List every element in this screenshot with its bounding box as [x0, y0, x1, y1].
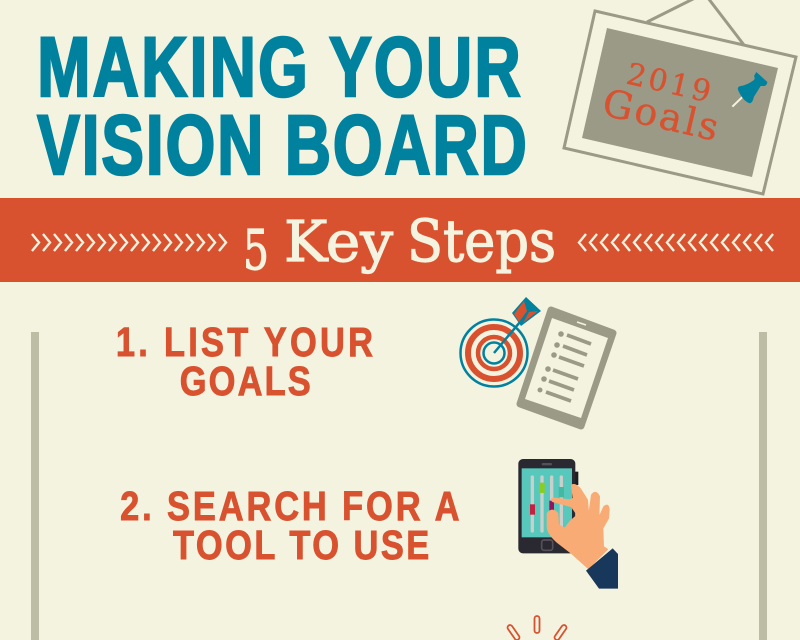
icon: hand on phone	[518, 459, 618, 589]
right side bar	[759, 332, 767, 640]
title: MAKING YOUR	[37, 19, 521, 114]
icon: burst rays	[507, 616, 567, 640]
banner heading: 5	[243, 218, 269, 282]
board	[582, 28, 778, 177]
step 1 text: 1. LIST YOUR	[116, 320, 373, 366]
banner heading: Steps	[407, 207, 556, 275]
banner heading	[243, 207, 556, 282]
title: VISION BOARD	[37, 97, 527, 192]
picture frame: 2019 Goals	[564, 0, 796, 194]
step 1 text	[116, 320, 373, 405]
icon: tablet checklist	[520, 310, 613, 426]
icon: target with arrow	[460, 297, 541, 386]
icon: push pin	[732, 72, 767, 107]
frame	[564, 11, 796, 194]
step 2 text: 2. SEARCH FOR A	[120, 484, 459, 530]
board text 2019: 2019	[623, 57, 717, 111]
board text Goals: Goals	[598, 80, 725, 150]
step 2 text: TOOL TO USE	[173, 523, 429, 569]
banner	[0, 198, 800, 282]
banner heading: Key	[284, 210, 393, 275]
hanging wire	[647, 0, 744, 45]
banner chevrons right	[579, 234, 773, 251]
left side bar	[31, 332, 39, 640]
step 1 text: GOALS	[180, 359, 311, 405]
title	[37, 19, 527, 192]
banner chevrons left	[32, 234, 226, 251]
step 2 text	[120, 484, 459, 569]
